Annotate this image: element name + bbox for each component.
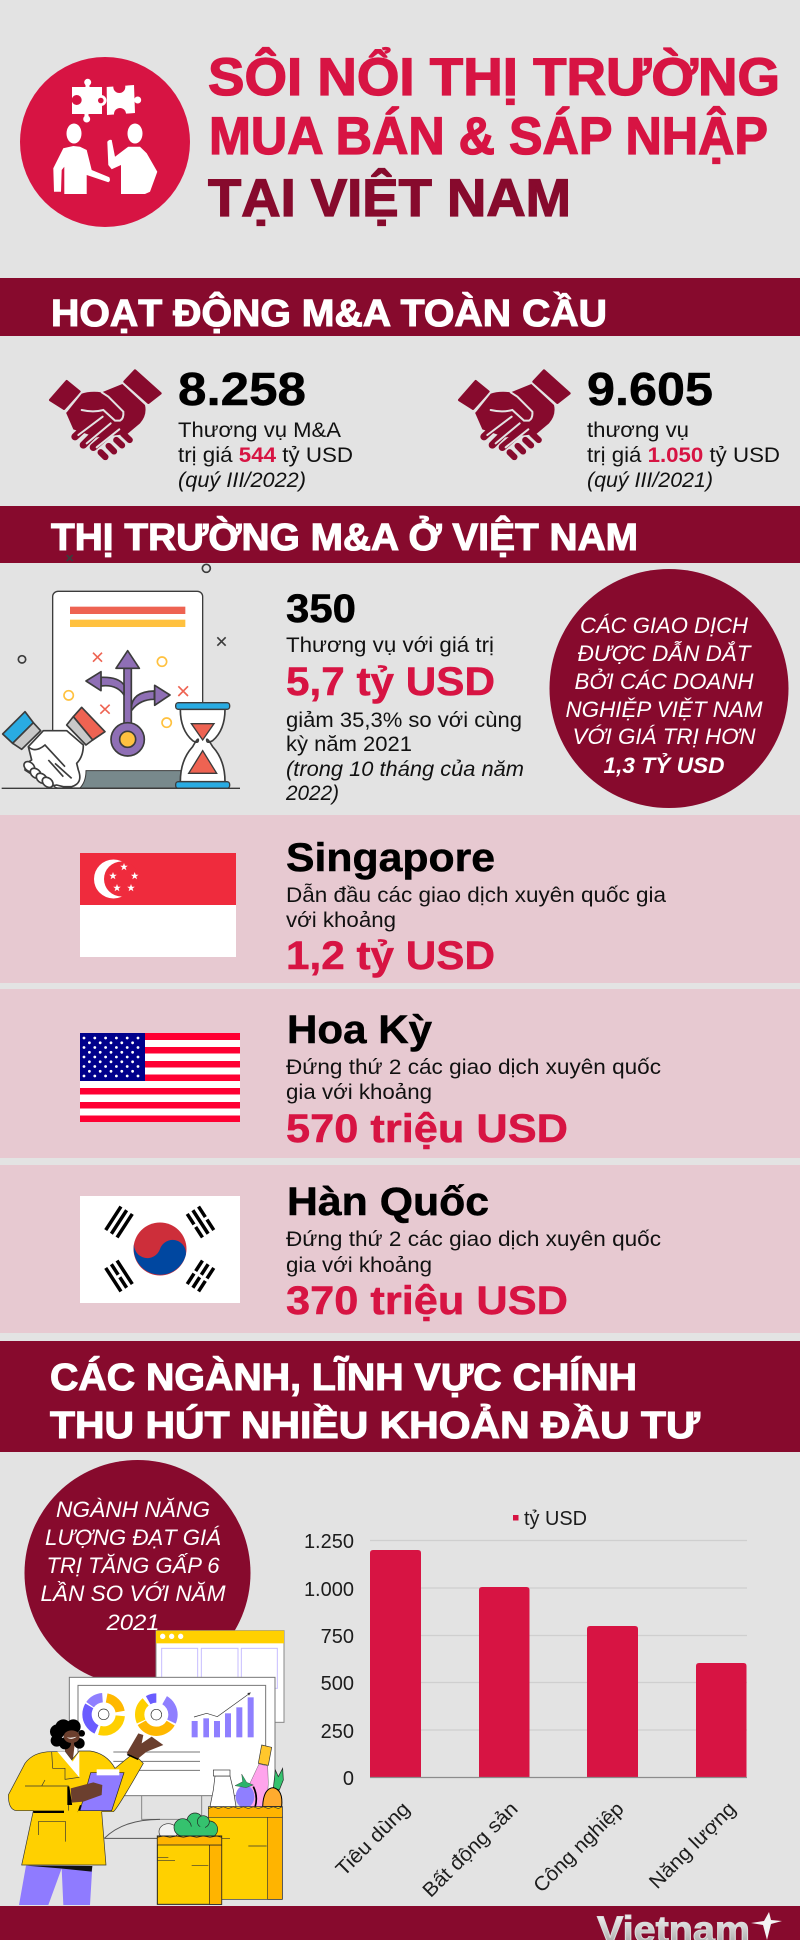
heading band: main sectors bbox=[0, 1341, 800, 1452]
text: Singapore: Dẫn đầu các giao dịch xuyên quốc gia bbox=[286, 884, 666, 907]
y axis labels: 1.250 bbox=[304, 1531, 354, 1553]
callout: Vietnamese-led deals: ĐƯỢC DẪN DẮT bbox=[578, 640, 752, 666]
text: United States: gia với khoảng bbox=[286, 1081, 432, 1104]
stat: Vietnam M&A 10 months: 5,7 tỷ USD bbox=[286, 660, 495, 704]
text: South Korea bbox=[286, 1180, 661, 1323]
heading band: Vietnam M&A market: THỊ TRƯỜNG M&A Ở VIỆT NAM bbox=[51, 515, 638, 559]
callout: energy sector: LƯỢNG ĐẠT GIÁ bbox=[45, 1525, 221, 1550]
x axis labels: Tiêu dùng bbox=[332, 1798, 415, 1881]
stat: Q3 2021: trị giá 1.050 tỷ USD bbox=[587, 444, 780, 467]
icon: handshake 2022 bbox=[50, 371, 160, 457]
text: South Korea: gia với khoảng bbox=[286, 1254, 432, 1277]
heading band: Vietnam M&A market bbox=[0, 506, 800, 563]
callout: Vietnamese-led deals: 1,3 TỶ USD bbox=[604, 753, 725, 778]
text: Singapore: Singapore bbox=[286, 836, 495, 880]
x axis labels: Bất động sản bbox=[419, 1798, 523, 1902]
callout: energy sector: 2021 bbox=[105, 1610, 160, 1635]
text: Singapore: với khoảng bbox=[286, 909, 396, 932]
title: TẠI VIỆT NAM bbox=[208, 167, 571, 228]
stat: Q3 2022: Thương vụ M&A bbox=[178, 419, 341, 442]
stat: Q3 2021 bbox=[587, 363, 780, 492]
callout: Vietnamese-led deals: BỞI CÁC DOANH bbox=[574, 668, 754, 694]
footer band with logo bbox=[0, 1906, 800, 1940]
stat: Vietnam M&A 10 months: (trong 10 tháng của năm bbox=[286, 758, 524, 781]
title: SÔI NỔI THỊ TRƯỜNG bbox=[208, 46, 780, 107]
text: South Korea: Hàn Quốc bbox=[287, 1180, 489, 1224]
stat: Q3 2022: (quý III/2022) bbox=[178, 469, 306, 492]
callout: Vietnamese-led deals: CÁC GIAO DỊCH bbox=[580, 613, 748, 638]
callout: energy sector: LẦN SO VỚI NĂM bbox=[40, 1581, 226, 1606]
stat: Vietnam M&A 10 months: Thương vụ với giá trị bbox=[286, 634, 494, 657]
y axis labels: 250 bbox=[321, 1721, 354, 1743]
title: MUA BÁN & SÁP NHẬP bbox=[209, 105, 768, 166]
title bbox=[208, 46, 780, 228]
panel: South Korea bbox=[0, 1165, 800, 1333]
callout: energy sector: TRỊ TĂNG GẤP 6 bbox=[46, 1553, 220, 1578]
callout: energy sector bbox=[24, 1460, 250, 1686]
heading band: main sectors: CÁC NGÀNH, LĨNH VỰC CHÍNH bbox=[50, 1355, 637, 1399]
callout: Vietnamese-led deals bbox=[550, 569, 788, 808]
y axis labels bbox=[304, 1531, 354, 1790]
panel: Singapore bbox=[0, 815, 800, 983]
callout: energy sector: NGÀNH NĂNG bbox=[56, 1497, 210, 1522]
y axis labels: 0 bbox=[343, 1768, 354, 1790]
stat: Q3 2021: 9.605 bbox=[587, 363, 713, 415]
icon: business people and puzzle bbox=[20, 57, 190, 227]
text: United States bbox=[286, 1008, 661, 1151]
stat: Vietnam M&A 10 months: 350 bbox=[286, 587, 356, 631]
stat: Vietnam M&A 10 months: giảm 35,3% so với cùng bbox=[286, 709, 522, 732]
callout: Vietnamese-led deals: NGHIỆP VIỆT NAM bbox=[566, 697, 763, 722]
stat: Q3 2022 bbox=[178, 363, 353, 492]
illustration: analyst, dashboard and grocery bags bbox=[8, 1631, 284, 1905]
y axis labels: 750 bbox=[321, 1626, 354, 1648]
text: Singapore: 1,2 tỷ USD bbox=[286, 934, 495, 978]
y axis labels: 1.000 bbox=[304, 1579, 354, 1601]
flag: South Korea bbox=[80, 1196, 240, 1303]
text: United States: Hoa Kỳ bbox=[287, 1008, 433, 1052]
text: Singapore bbox=[286, 836, 666, 978]
panel: United States bbox=[0, 989, 800, 1158]
stat: Vietnam M&A 10 months bbox=[285, 587, 524, 805]
bar chart: investment by sector bbox=[304, 1508, 747, 1902]
x axis labels: Năng lượng bbox=[645, 1798, 741, 1893]
flag: United States bbox=[80, 1033, 240, 1122]
text: South Korea: Đứng thứ 2 các giao dịch xuyên quốc bbox=[286, 1228, 661, 1251]
stat: Vietnam M&A 10 months: 2022) bbox=[285, 782, 339, 805]
x axis labels bbox=[332, 1798, 741, 1902]
text: United States: 570 triệu USD bbox=[286, 1107, 568, 1151]
logo star bbox=[751, 1912, 782, 1940]
stat: Vietnam M&A 10 months: kỳ năm 2021 bbox=[286, 733, 412, 756]
y axis labels: 500 bbox=[321, 1673, 354, 1695]
heading band: main sectors: THU HÚT NHIỀU KHOẢN ĐẦU TƯ bbox=[50, 1403, 701, 1447]
heading band: global M&A activity bbox=[0, 278, 800, 336]
x axis labels: Công nghiệp bbox=[530, 1798, 629, 1897]
stat: Q3 2022: 8.258 bbox=[178, 363, 306, 415]
icon: handshake 2021 bbox=[459, 371, 569, 457]
heading band: global M&A activity: HOẠT ĐỘNG M&A TOÀN CẦU bbox=[51, 290, 607, 335]
callout: Vietnamese-led deals: VỚI GIÁ TRỊ HƠN bbox=[572, 724, 756, 749]
illustration: strategy board, handshake and hourglass bbox=[2, 555, 240, 790]
text: United States: Đứng thứ 2 các giao dịch xuyên quốc bbox=[286, 1056, 661, 1079]
stat: Q3 2021: thương vụ bbox=[587, 419, 689, 442]
stat: Q3 2021: (quý III/2021) bbox=[587, 469, 713, 492]
text: South Korea: 370 triệu USD bbox=[286, 1279, 568, 1323]
stat: Q3 2022: trị giá 544 tỷ USD bbox=[178, 444, 353, 467]
bars bbox=[370, 1550, 746, 1777]
flag: Singapore bbox=[80, 853, 236, 957]
chart legend: tỷ USD bbox=[524, 1508, 587, 1530]
